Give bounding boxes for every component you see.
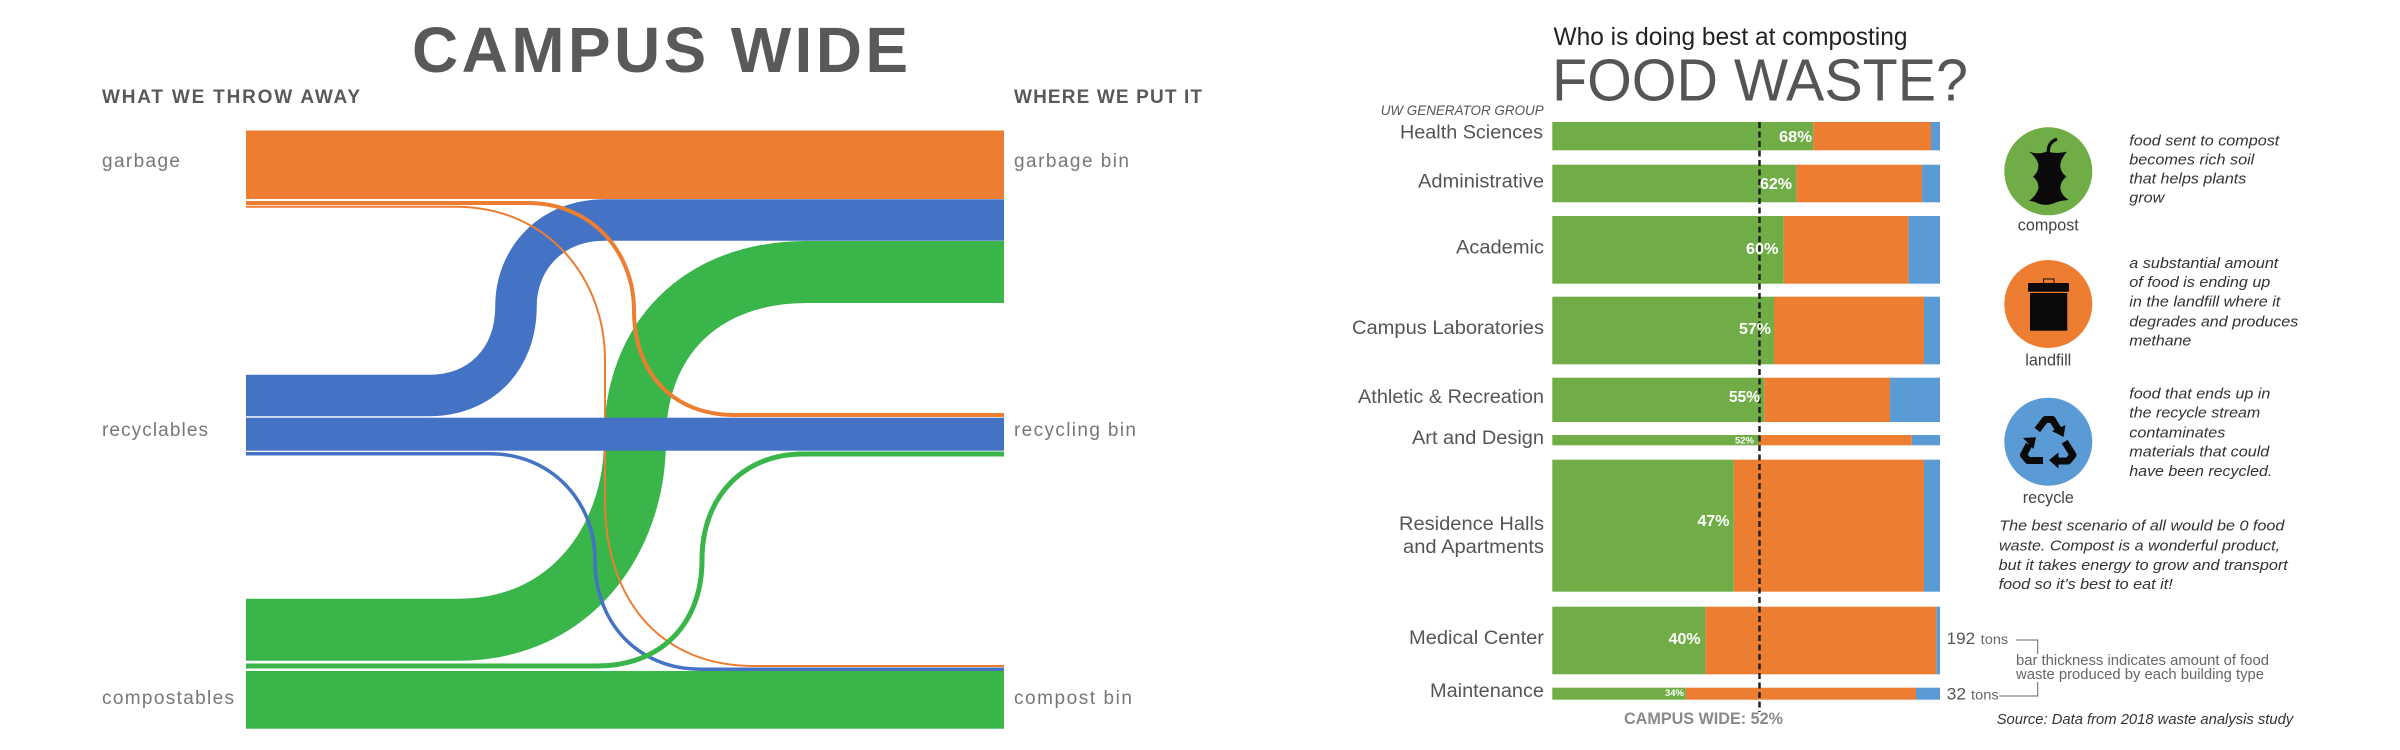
campus wide caption: CAMPUS WIDE: 52% [1624,710,1783,728]
flow: garbage to recycling bin [246,203,1004,415]
right labels: compost bin [1014,688,1132,709]
landfill legend [2004,255,2299,370]
text: recycle description: contaminates [2129,424,2226,441]
percentage labels [1665,129,1812,699]
text: recycle description [2129,385,2272,480]
text: best scenario note: but it takes energy to grow and transport [1999,557,2289,574]
text: landfill description: methane [2129,333,2191,350]
headline: food waste: FOOD WASTE? [1552,48,1968,114]
axis caption: UW GENERATOR GROUP [1381,102,1544,118]
text: best scenario note [1999,518,2289,593]
category labels: Maintenance [1430,681,1544,702]
tonnage annotation: 192 tons: 192 [1947,629,1975,648]
category labels [1352,122,1545,702]
percentage labels: 57% [1739,321,1771,338]
flow: garbage to compost bin [246,207,1004,666]
text: compost description: becomes rich soil [2129,151,2255,168]
bar: athletic and recreation [1552,378,1940,422]
text: bar thickness note [2015,653,2269,683]
bar: art and design [1552,435,1940,445]
percentage labels: 40% [1669,631,1701,648]
stacked bar chart [1552,122,1940,712]
category labels: Residence Halls [1399,514,1544,535]
tonnage annotation: 32 tons: tons [1971,687,1999,702]
right labels [1014,151,1136,709]
category labels: Administrative [1418,171,1544,192]
text: landfill description: of food is ending up [2129,274,2270,291]
flow: recyclables to recycling bin [246,418,1004,451]
heading: where we put it: WHERE WE PUT IT [1014,87,1202,108]
bar: academic [1552,216,1940,284]
category labels: Medical Center [1409,628,1545,649]
right labels: recycling bin [1014,420,1136,441]
category labels: Athletic & Recreation [1358,387,1544,408]
percentage labels: 62% [1760,176,1792,193]
bar: medical center [1552,607,1940,674]
flow: garbage to garbage bin [246,130,1004,199]
title: campus wide: CAMPUS WIDE [412,14,908,86]
text: best scenario note: food so it’s best to eat it! [1999,576,2174,593]
text: landfill description: in the landfill where it [2129,293,2281,310]
recycle legend [2004,385,2272,507]
text: recycle description: the recycle stream [2129,404,2260,421]
flow: recyclables to garbage bin [246,220,1004,396]
icon: trash can [2004,260,2092,348]
category labels: Art and Design [1412,428,1544,449]
icon: recycling arrows [2004,398,2092,486]
percentage labels: 52% [1735,436,1755,446]
tonnage annotation: 192 tons: tons [1981,632,2008,647]
heading: what we throw away: WHAT WE THROW AWAY [102,87,360,108]
campus-wide dashed line [1758,122,1761,712]
left labels: compostables [102,688,234,709]
tonnage annotation: 32 tons [1947,684,1999,703]
category labels: Campus Laboratories [1352,318,1544,339]
percentage labels: 55% [1729,389,1760,406]
flow: compostables to recycling bin [246,454,1004,666]
tonnage annotation: 32 tons: 32 [1947,684,1966,703]
text: recycle description: food that ends up in [2129,385,2270,402]
text: best scenario note: waste. Compost is a wonderful product, [1999,538,2280,555]
flow: compostables to garbage bin [246,272,1004,630]
left labels [102,151,234,709]
label: recycle: recycle [2023,488,2074,507]
bracket [1999,640,2038,696]
right labels: garbage bin [1014,151,1129,172]
category labels: Health Sciences [1400,122,1543,143]
bar: maintenance [1552,688,1940,700]
percentage labels: 68% [1779,129,1812,146]
label: landfill: landfill [2025,351,2071,370]
percentage labels: 60% [1746,241,1778,258]
left labels: garbage [102,151,180,172]
text: source: Source: Data from 2018 waste analysis study [1997,711,2295,728]
percentage labels: 47% [1698,513,1730,530]
text: recycle description: have been recycled. [2129,463,2272,480]
text: best scenario note: The best scenario of all would be 0 food [1999,518,2285,535]
text: landfill description: degrades and produces [2129,314,2299,331]
bar: administrative [1552,165,1940,202]
text: compost description: grow [2129,190,2166,207]
text: bar thickness note: bar thickness indicates amount of food [2016,653,2269,669]
text: landfill description: a substantial amount [2129,255,2279,272]
compost legend [2004,127,2280,235]
bar: campus laboratories [1552,297,1940,364]
category labels: Academic [1456,237,1544,258]
bar: residence halls [1552,460,1940,592]
bar: health sciences [1552,122,1940,150]
text: bar thickness note: waste produced by each building type [2015,667,2264,683]
text: compost description: food sent to compost [2129,132,2280,149]
text: compost description [2129,132,2280,207]
flow: recyclables to compost bin [246,454,1004,669]
tonnage annotation: 192 tons [1947,629,2008,648]
category labels: and Apartments [1403,537,1544,558]
subtitle: Who is doing best at composting [1554,23,1908,51]
flow: compostables to compost bin [246,671,1004,729]
text: landfill description [2129,255,2299,350]
text: recycle description: materials that could [2129,444,2270,461]
sankey diagram [246,130,1004,729]
icon: apple core [2004,127,2092,215]
label: compost: compost [2018,216,2079,235]
text: compost description: that helps plants [2129,171,2247,188]
left labels: recyclables [102,420,208,441]
percentage labels: 34% [1665,688,1685,699]
